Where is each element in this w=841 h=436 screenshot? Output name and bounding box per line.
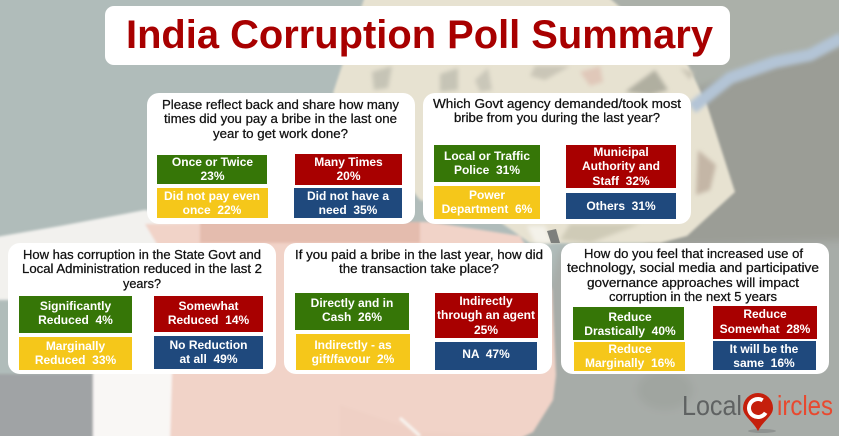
question text: governance approaches will impact bbox=[587, 276, 800, 290]
option: once or twice: 23% bbox=[200, 169, 225, 183]
option: somewhat bbox=[154, 296, 263, 332]
option: police: Local or Traffic bbox=[444, 149, 530, 163]
question text bbox=[22, 248, 262, 291]
option: agent: Indirectly bbox=[459, 294, 513, 308]
option: somewhat bbox=[713, 306, 817, 339]
option: somewhat: Reduced 14% bbox=[168, 313, 250, 327]
question text bbox=[433, 97, 682, 125]
option: municipal: Municipal bbox=[593, 145, 649, 159]
option: NA: NA 47% bbox=[462, 347, 510, 361]
option: municipal bbox=[566, 145, 676, 188]
option: others bbox=[566, 193, 676, 219]
option: marginally: Reduced 33% bbox=[35, 353, 117, 367]
option: somewhat: Reduce bbox=[743, 307, 787, 321]
icon: map pin with C bbox=[743, 393, 776, 433]
question text: times did you pay a bribe in the last one bbox=[164, 112, 397, 126]
option: many times bbox=[295, 154, 402, 185]
option: marginally: Marginally 16% bbox=[585, 356, 675, 370]
option: police: Police 31% bbox=[454, 163, 520, 177]
panel: bribes paid in last year bbox=[147, 93, 415, 224]
option: gift: gift/favour 2% bbox=[312, 352, 395, 366]
option: drastically: Drastically 40% bbox=[584, 324, 676, 338]
option: cash: Cash 26% bbox=[322, 310, 382, 324]
option: did not pay bbox=[157, 188, 268, 218]
option: gift bbox=[296, 334, 410, 370]
question text: corruption in the next 5 years bbox=[609, 290, 777, 304]
panel: technology impact bbox=[561, 243, 829, 374]
question text: years? bbox=[123, 277, 161, 291]
question text: the transaction take place? bbox=[339, 262, 499, 276]
option: NA bbox=[435, 342, 537, 370]
option: no reduction bbox=[154, 336, 263, 369]
question text: technology, social media and participative bbox=[567, 261, 819, 275]
option: agent: through an agent bbox=[437, 308, 535, 322]
question text bbox=[567, 247, 819, 304]
option: the same: same 16% bbox=[733, 356, 795, 370]
option: others: Others 31% bbox=[586, 199, 656, 213]
option: no need: Did not have a bbox=[307, 189, 389, 203]
option: the same bbox=[713, 341, 816, 370]
option: power bbox=[434, 186, 540, 219]
option: many times: Many Times bbox=[314, 155, 383, 169]
logo: LocalCircles bbox=[682, 390, 833, 433]
option: did not pay: once 22% bbox=[183, 203, 242, 217]
option: drastically: Reduce bbox=[608, 310, 652, 324]
option: no reduction: No Reduction bbox=[170, 338, 248, 352]
option: marginally bbox=[19, 337, 132, 370]
option: power: Department 6% bbox=[442, 202, 533, 216]
option: police bbox=[434, 145, 540, 182]
option: the same: It will be the bbox=[730, 342, 799, 356]
question text: bribe from you during the last year? bbox=[454, 111, 660, 125]
question text: How do you feel that increased use of bbox=[584, 247, 804, 261]
option: drastically bbox=[573, 307, 684, 340]
option: marginally: Marginally bbox=[46, 339, 105, 353]
option: municipal: Authority and bbox=[582, 159, 660, 173]
option: somewhat: Somewhat 28% bbox=[720, 322, 811, 336]
question text: How has corruption in the State Govt and bbox=[23, 248, 261, 262]
option: did not pay: Did not pay even bbox=[164, 189, 260, 203]
option: no reduction: at all 49% bbox=[179, 352, 238, 366]
question text bbox=[162, 98, 400, 141]
logo: LocalCircles: ircles bbox=[777, 390, 833, 421]
dark stamp on banknote bbox=[547, 229, 560, 243]
title panel bbox=[105, 6, 730, 65]
option: gift: Indirectly - as bbox=[314, 338, 392, 352]
question text: year to get work done? bbox=[213, 127, 348, 141]
option: no need: need 35% bbox=[319, 203, 378, 217]
option: cash: Directly and in bbox=[311, 296, 393, 310]
question text: Which Govt agency demanded/took most bbox=[433, 97, 682, 111]
option: marginally bbox=[574, 342, 685, 371]
option: once or twice bbox=[157, 155, 267, 184]
option: many times: 20% bbox=[336, 169, 361, 183]
panel: corruption reduced bbox=[8, 243, 276, 374]
question text bbox=[295, 248, 543, 276]
panel: transaction type bbox=[284, 243, 552, 374]
question text: Please reflect back and share how many bbox=[162, 98, 400, 112]
option: municipal: Staff 32% bbox=[592, 174, 650, 188]
option: cash bbox=[295, 293, 409, 330]
option: significantly: Significantly bbox=[40, 299, 111, 313]
option: agent: 25% bbox=[474, 323, 498, 337]
option: significantly bbox=[19, 296, 132, 333]
question text: If you paid a bribe in the last year, how did bbox=[295, 248, 543, 262]
panel: govt agency bbox=[423, 93, 691, 224]
option: power: Power bbox=[469, 188, 505, 202]
option: once or twice: Once or Twice bbox=[172, 155, 253, 169]
option: marginally: Reduce bbox=[608, 342, 652, 356]
option: significantly: Reduced 4% bbox=[38, 313, 113, 327]
option: agent bbox=[435, 293, 538, 338]
logo: LocalCircles: Local bbox=[682, 390, 742, 421]
option: no need bbox=[294, 188, 402, 218]
question text: Local Administration reduced in the last 2 bbox=[22, 262, 262, 276]
option: somewhat: Somewhat bbox=[178, 299, 239, 313]
title: India Corruption Poll Summary bbox=[126, 13, 714, 57]
